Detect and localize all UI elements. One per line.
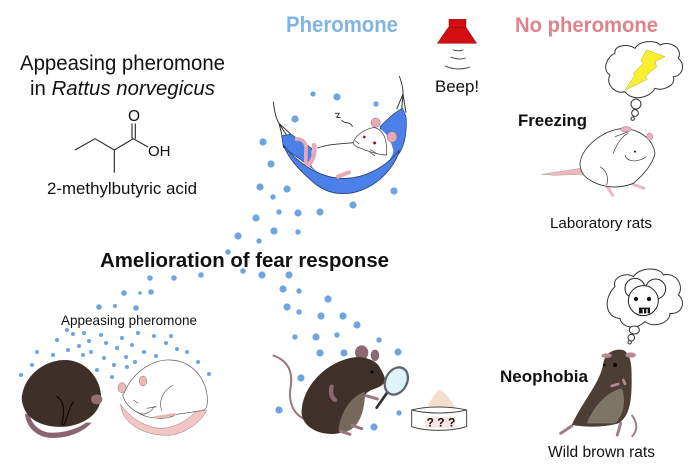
thought bubble with lightning bolt (606, 42, 683, 120)
label: beep: Beep! (435, 77, 479, 96)
heading: pheromone: Pheromone (286, 12, 398, 37)
illustration: white rat freezing (542, 127, 655, 195)
illustration: white rat curled up (118, 360, 207, 435)
icon: speaker with sound waves (437, 19, 477, 69)
illustration: wild brown rat (561, 350, 636, 437)
illustration: white rat sleeping in blue hammock (273, 76, 406, 194)
illustration: dish with unknown food: ? ? ? (427, 416, 455, 430)
label: laboratory rats: Laboratory rats (550, 216, 652, 232)
illustration: brown rat curled up (22, 360, 102, 438)
heading: amelioration of fear response: Amelioration of fear response (100, 249, 389, 272)
label: wild brown rats: Wild brown rats (548, 444, 655, 461)
label: appeasing pheromone: Appeasing pheromone (61, 312, 197, 328)
chemical structure: 2-methylbutyric acid: OH (148, 143, 170, 160)
chemical name: 2-methylbutyric acid (47, 179, 197, 198)
illustration: brown rat inspecting with magnifying glass (273, 345, 412, 434)
chemical structure: 2-methylbutyric acid: O (128, 108, 140, 125)
title: Appeasing pheromone (20, 52, 225, 75)
title (20, 52, 225, 100)
title: in Rattus norvegicus (30, 77, 215, 100)
label: freezing: Freezing (518, 111, 587, 130)
chemical structure: 2-methylbutyric acid (75, 108, 170, 173)
pheromone dots (19, 91, 402, 431)
thought bubble with skull (607, 269, 682, 344)
illustration: dish with unknown food (412, 390, 467, 430)
label: neophobia: Neophobia (500, 367, 589, 386)
heading: no pheromone: No pheromone (515, 13, 658, 37)
